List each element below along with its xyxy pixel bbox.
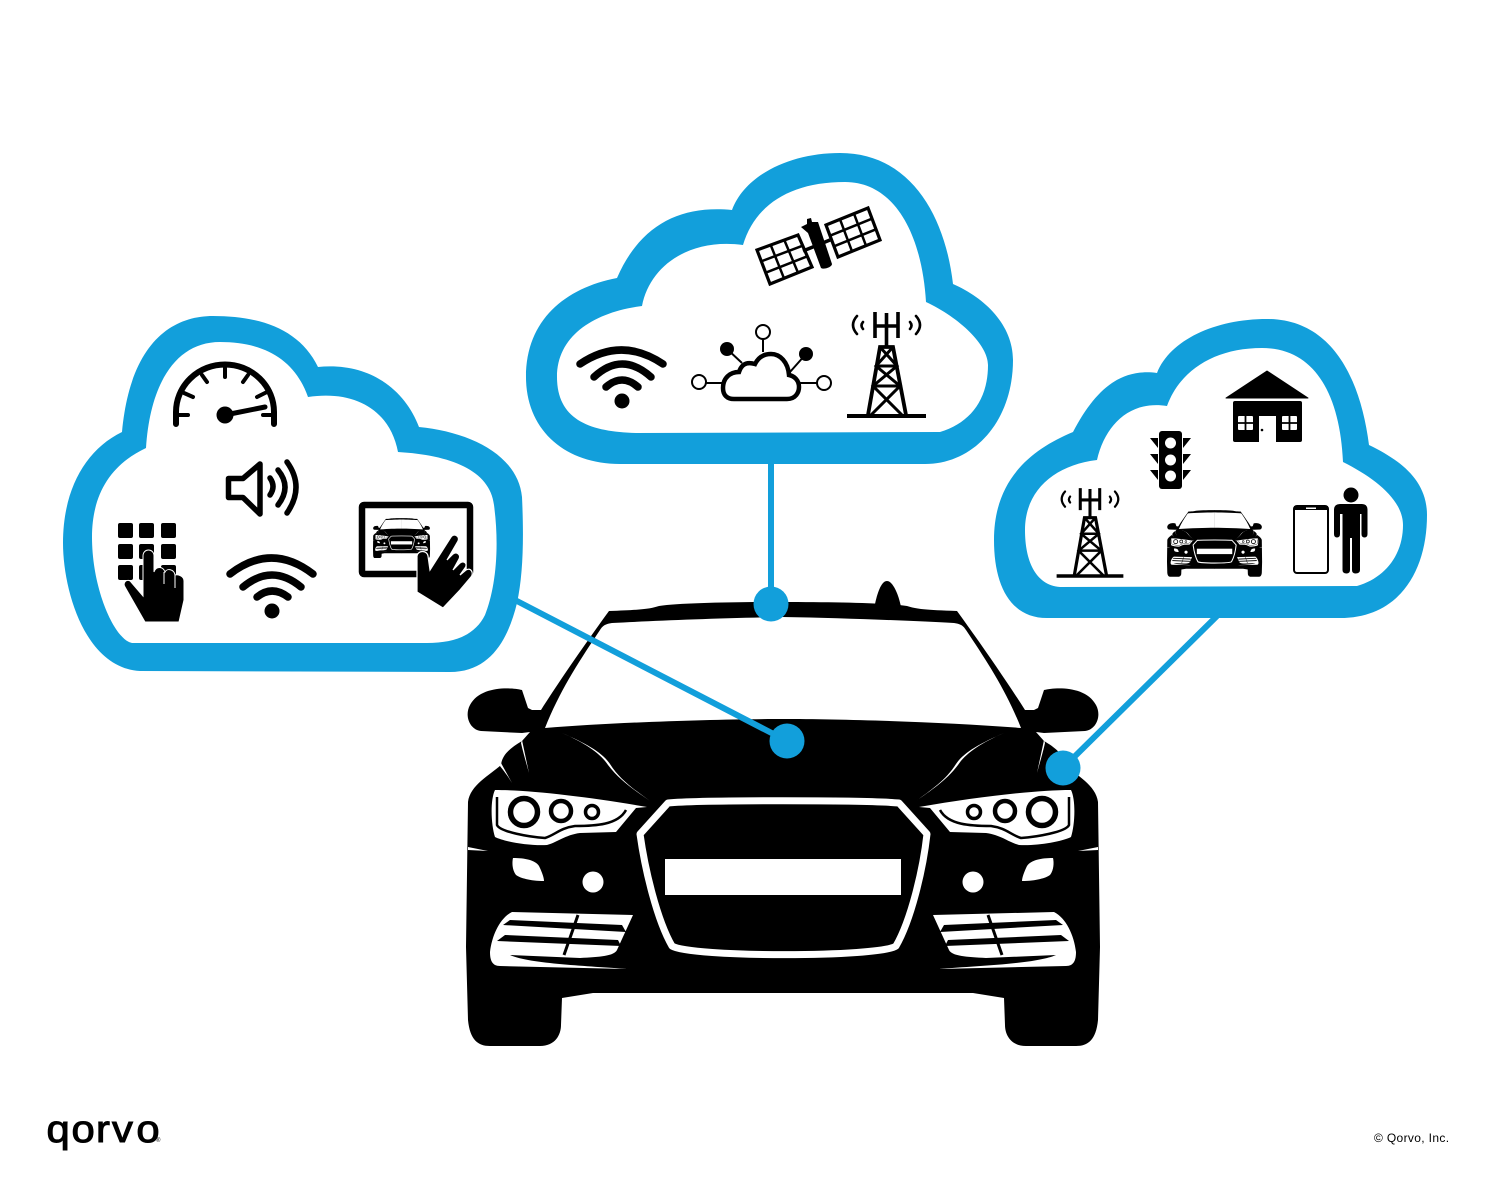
icon: house <box>1226 371 1308 443</box>
cloud outline <box>63 316 523 672</box>
icon: small car <box>1167 510 1262 577</box>
icon: person <box>1334 488 1368 574</box>
icon: cell tower <box>1057 488 1123 576</box>
panel: top cloud, external connectivity <box>526 153 1013 464</box>
icon: cell tower <box>847 312 926 416</box>
copyright notice: © Qorvo, Inc. <box>1374 1131 1449 1145</box>
icon: satellite <box>757 208 880 284</box>
icon: smartphone <box>1294 506 1328 573</box>
connector: right cloud to fender <box>1046 616 1217 786</box>
panel: right cloud, vehicle to everything <box>994 319 1427 618</box>
connector: top cloud to roof <box>754 462 788 622</box>
car illustration <box>466 581 1100 1046</box>
icon: IoT cloud network <box>692 325 831 399</box>
icon: keypad with pointing hand <box>118 523 184 622</box>
icon: speaker <box>228 462 296 514</box>
icon: speedometer <box>176 365 274 424</box>
cloud outline <box>526 153 1013 464</box>
icon: wifi signal <box>580 350 663 408</box>
icon: touchscreen with car and hand <box>362 505 472 608</box>
icon: traffic light <box>1150 431 1191 489</box>
cloud outline <box>994 319 1427 618</box>
panel: left cloud, in-car connectivity <box>63 316 523 672</box>
icon: wifi signal <box>230 558 313 618</box>
connector: left cloud to hood <box>515 600 804 758</box>
logo: Qorvo: qorvo <box>47 1109 160 1151</box>
logo: Qorvo: ® <box>156 1137 161 1144</box>
